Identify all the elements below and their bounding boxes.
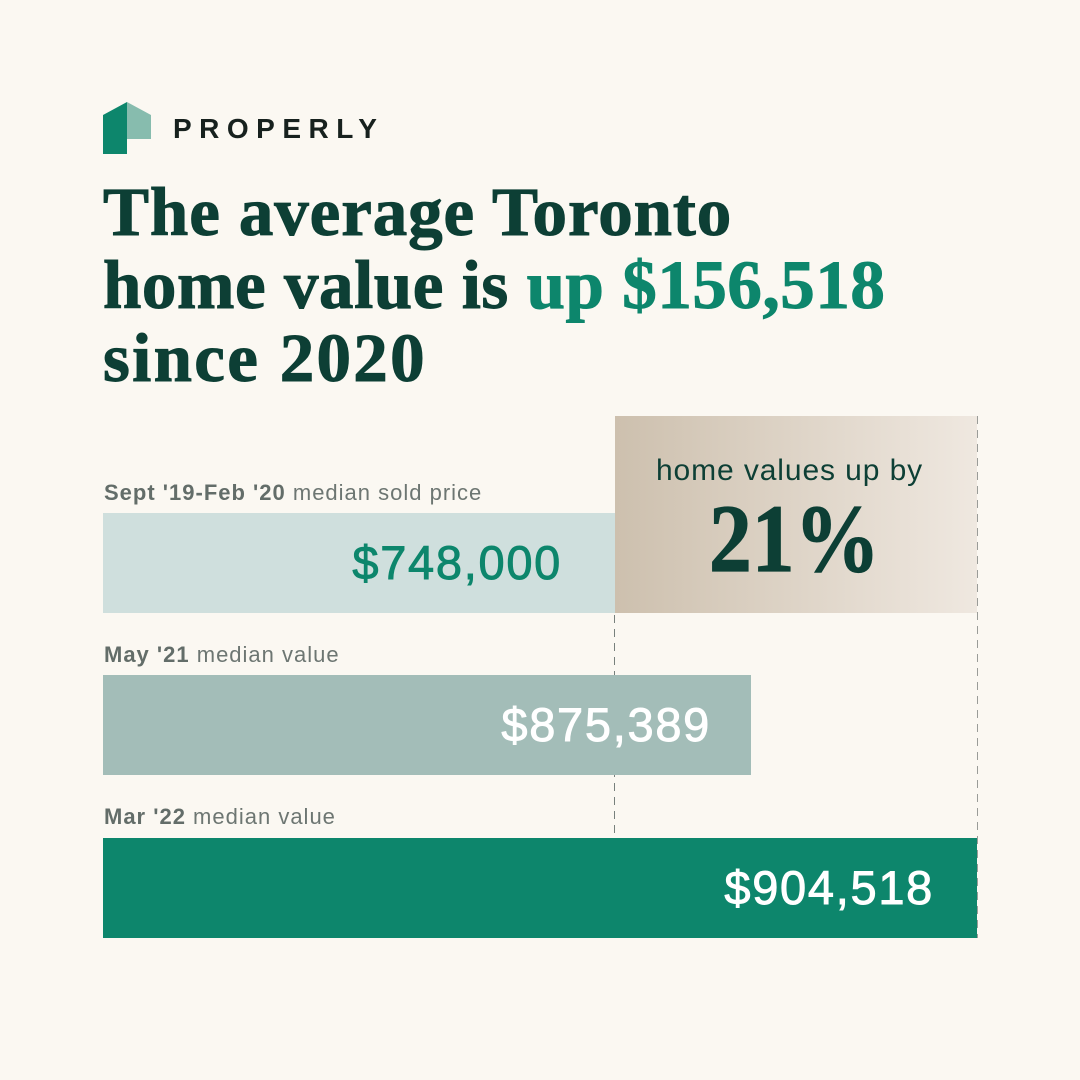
icon: house <box>103 102 151 154</box>
title: home value is up $156,518 <box>103 247 885 323</box>
bar label 3: Mar '22 median value <box>104 804 336 829</box>
bar 3 <box>103 838 977 938</box>
callout: home values up by 21% <box>615 416 977 613</box>
dashed guide left <box>614 615 615 837</box>
bar 2 value: $875,389 <box>501 698 711 751</box>
title <box>103 174 885 396</box>
bar 1 <box>103 513 615 613</box>
bar 2 <box>103 675 751 775</box>
dashed guide right <box>977 416 978 938</box>
bar label 1: Sept '19-Feb '20 median sold price <box>104 480 482 505</box>
bar 1 value: $748,000 <box>352 536 562 589</box>
bar label 2: May '21 median value <box>104 642 340 667</box>
title: The average Toronto <box>103 174 732 250</box>
bar 3 value: $904,518 <box>724 861 934 914</box>
wordmark: PROPERLY <box>173 113 384 144</box>
callout label: home values up by <box>656 454 923 487</box>
title: since 2020 <box>103 320 427 396</box>
logo <box>103 102 384 154</box>
callout number: 21% <box>709 485 880 592</box>
